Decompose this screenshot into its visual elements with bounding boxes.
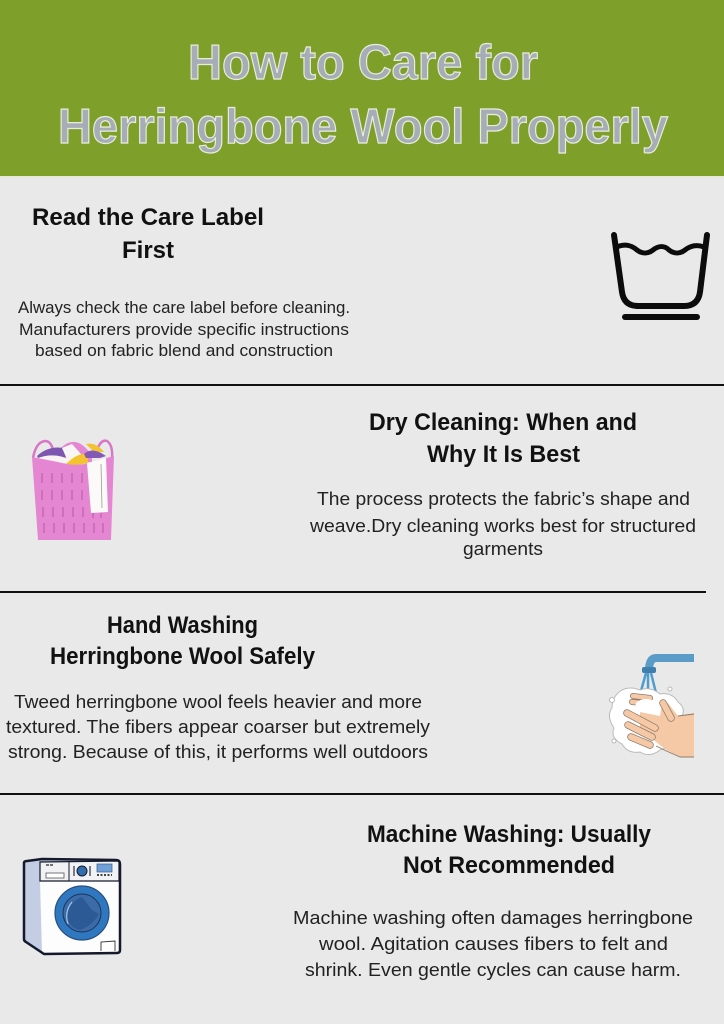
text: machine washing description: shrink. Even gentle cycles can cause harm. xyxy=(305,959,681,980)
title: Herringbone Wool Properly xyxy=(58,100,668,154)
title: How to Care for xyxy=(188,36,538,90)
icon: laundry basket xyxy=(32,441,114,540)
icon: hands washing under tap xyxy=(609,658,694,757)
text: dry cleaning description: weave.Dry cleaning works best for structured xyxy=(309,515,696,536)
panel: read the care label xyxy=(18,204,707,360)
heading: read the care label: Read the Care Label xyxy=(32,204,264,231)
heading: hand washing xyxy=(50,612,315,670)
panel: machine washing xyxy=(24,821,693,980)
text: machine washing description: wool. Agitation causes fibers to felt and xyxy=(318,933,668,954)
text: care label description xyxy=(18,298,350,360)
heading: dry cleaning xyxy=(369,409,637,468)
text: hand washing description: strong. Because of this, it performs well outdoors xyxy=(8,741,428,762)
icon: wash tub care symbol xyxy=(614,235,707,317)
text: dry cleaning description: The process protects the fabric’s shape and xyxy=(317,488,690,509)
text: care label description: Always check the care label before cleaning. xyxy=(18,298,350,317)
title banner xyxy=(0,0,724,176)
text: hand washing description xyxy=(6,691,431,762)
text: care label description: Manufacturers provide specific instructions xyxy=(19,320,349,339)
text: machine washing description: Machine washing often damages herringbone xyxy=(293,907,693,928)
title xyxy=(58,36,668,154)
text: machine washing description xyxy=(293,907,693,980)
text: dry cleaning description: garments xyxy=(463,538,543,559)
heading: machine washing: Machine Washing: Usually xyxy=(367,821,651,848)
icon: washing machine xyxy=(24,859,120,954)
text: hand washing description: textured. The fibers appear coarser but extremely xyxy=(6,716,431,737)
heading: machine washing: Not Recommended xyxy=(403,852,615,879)
heading: read the care label xyxy=(32,204,264,264)
text: dry cleaning description xyxy=(309,488,696,559)
heading: dry cleaning: Dry Cleaning: When and xyxy=(369,409,637,436)
heading: hand washing: Hand Washing xyxy=(107,612,258,639)
panel: hand washing xyxy=(6,612,694,762)
heading: machine washing xyxy=(367,821,651,879)
text: hand washing description: Tweed herringbone wool feels heavier and more xyxy=(14,691,422,712)
text: care label description: based on fabric blend and construction xyxy=(35,341,333,360)
panel: dry cleaning xyxy=(32,409,696,559)
heading: dry cleaning: Why It Is Best xyxy=(427,441,580,468)
heading: hand washing: Herringbone Wool Safely xyxy=(50,643,315,670)
heading: read the care label: First xyxy=(122,237,174,264)
